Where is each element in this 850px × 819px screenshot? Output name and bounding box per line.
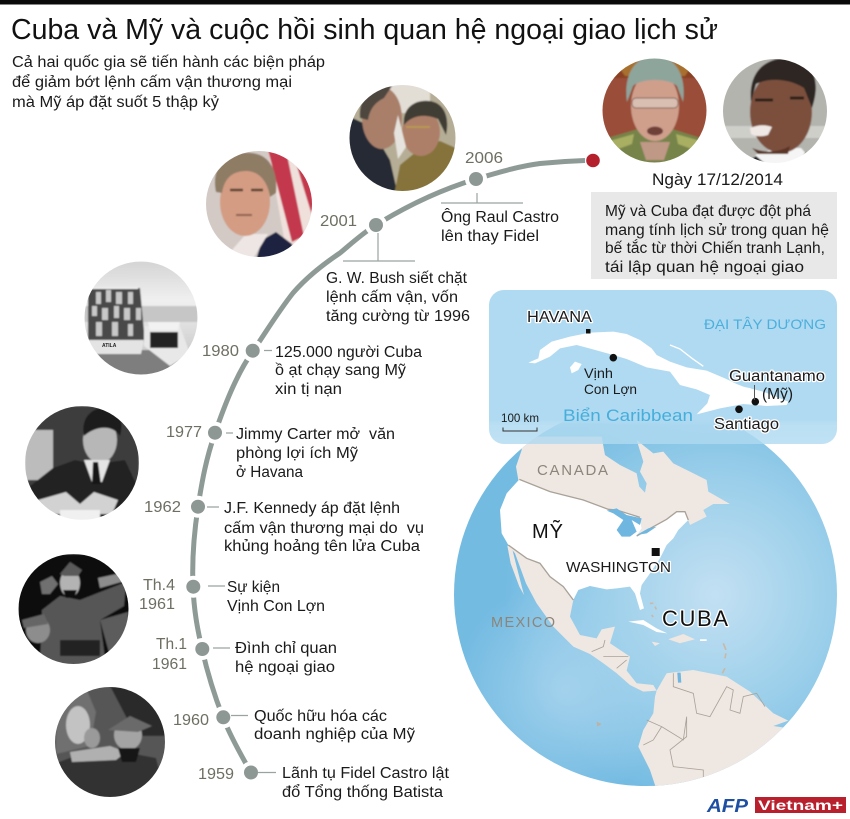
event April 1961: Sự kiện	[227, 579, 280, 596]
Caribbean islands	[652, 634, 695, 646]
event 1962	[144, 499, 424, 555]
Cuba on globe	[628, 620, 667, 633]
event 1980: 125.000 người Cuba	[275, 344, 422, 361]
event 1960: 1960	[173, 712, 209, 729]
logo: Vietnam+: Vietnam+	[758, 797, 843, 813]
event 1962: cấm vận thương mại do vụ	[224, 520, 424, 537]
land: Canada	[516, 437, 730, 536]
event 2001	[320, 213, 470, 325]
event 1977: Jimmy Carter mở văn	[236, 426, 395, 443]
event 1960: doanh nghiệp của Mỹ	[254, 726, 415, 743]
event April 1961: Vịnh Con Lợn	[227, 598, 325, 615]
photo: Mariel boats: ATILA	[102, 343, 117, 349]
event 1977	[166, 424, 395, 481]
marker: Santiago	[735, 406, 743, 413]
event 1959: đổ Tổng thống Batista	[282, 784, 443, 801]
event 2001: lệnh cấm vận, vốn	[326, 289, 458, 306]
event April 1961: Th.4	[143, 577, 175, 594]
map panel: Cuba detail: Biển Caribbean	[563, 407, 693, 425]
photo: Raul Castro	[602, 58, 706, 162]
event 2014: bế tắc từ thời Chiến tranh Lạnh,	[605, 240, 825, 257]
event 2001: 2001	[320, 213, 357, 230]
event 2014: mang tính lịch sử trong quan hệ	[605, 222, 829, 239]
photo: Barack Obama	[723, 59, 827, 163]
event 1977: 1977	[166, 424, 202, 441]
callout box	[591, 192, 837, 279]
Great Lakes	[607, 508, 642, 537]
marker: Bay of Pigs	[610, 354, 617, 362]
timeline nodes	[186, 172, 483, 780]
marker: Havana	[586, 329, 590, 334]
event January 1961: Th.1	[156, 636, 187, 653]
Cuba island	[528, 332, 788, 414]
event 1962: khủng hoảng tên lửa Cuba	[224, 538, 420, 555]
photo: George W. Bush	[206, 151, 312, 257]
event April 1961	[139, 577, 325, 615]
title: Cuba và Mỹ và cuộc hồi sinh quan hệ ngoại giao lịch sử	[11, 14, 718, 46]
borders in Central and South America	[592, 640, 765, 780]
event 1980: ồ ạt chạy sang Mỹ	[275, 362, 406, 379]
event 1977: phòng lợi ích Mỹ	[236, 445, 358, 462]
event 2014: tái lập quan hệ ngoại giao	[605, 259, 804, 276]
globe labels: CANADA	[537, 462, 608, 479]
map labels: HAVANA	[527, 309, 593, 326]
event January 1961: Đình chỉ quan	[235, 640, 337, 657]
photo: Mariel boats	[84, 261, 198, 376]
event 1980: xin tị nạn	[275, 381, 342, 398]
marker: Guantanamo	[752, 398, 759, 406]
map panel: Cuba detail	[489, 290, 837, 444]
event 1959	[198, 765, 450, 801]
event 1980: 1980	[202, 343, 239, 360]
land: Mexico and Central America	[508, 545, 657, 692]
end node	[586, 154, 600, 167]
photo: Fidel and Raul Castro	[348, 83, 458, 195]
photo: Fidel Castro 1959	[54, 686, 166, 798]
globe labels	[491, 462, 728, 631]
globe labels: WASHINGTON	[566, 559, 671, 576]
event 2006: 2006	[465, 150, 503, 167]
land: South America	[638, 670, 788, 786]
map panel: Cuba detail: ĐẠI TÂY DƯƠNG	[704, 316, 826, 332]
timeline curve	[186, 154, 600, 779]
event 1980	[202, 343, 422, 398]
logo: Vietnam+	[755, 797, 846, 813]
event 2014: Ngày 17/12/2014	[652, 171, 783, 189]
photo: Fidel Castro 1961	[18, 554, 130, 666]
event 2006	[441, 150, 559, 245]
globe map	[454, 403, 837, 793]
event 2006: Ông Raul Castro	[441, 209, 559, 226]
scale bar: 100 km	[501, 411, 539, 425]
event 1959: 1959	[198, 766, 234, 783]
scale bar	[501, 411, 539, 431]
event 2001: G. W. Bush siết chặt	[326, 270, 468, 287]
subtitle	[12, 54, 325, 111]
connector ticks	[207, 193, 523, 772]
event 2001: tăng cường từ 1996	[326, 308, 470, 325]
subtitle: mà Mỹ áp đặt suốt 5 thập kỷ	[12, 94, 219, 111]
globe labels: MỸ	[532, 519, 563, 543]
globe labels: MEXICO	[491, 615, 555, 631]
land: Baja California	[507, 546, 524, 595]
event 1962: J.F. Kennedy áp đặt lệnh	[224, 500, 400, 517]
event 1959: Lãnh tụ Fidel Castro lật	[282, 765, 450, 782]
land: United States	[500, 479, 688, 610]
event January 1961	[152, 636, 337, 676]
event 2014: Mỹ và Cuba đạt được đột phá	[605, 203, 811, 220]
photo: John F. Kennedy	[25, 406, 139, 520]
map panel: Cuba detail: Vịnh	[584, 365, 613, 381]
subtitle: Cả hai quốc gia sẽ tiến hành các biện pháp	[12, 54, 325, 71]
subtitle: để giảm bớt lệnh cấm vận thương mại	[12, 74, 292, 91]
map panel: Cuba detail: Con Lợn	[584, 381, 637, 397]
map panel: Cuba detail: (Mỹ)	[762, 386, 793, 403]
event April 1961: 1961	[139, 596, 175, 613]
event January 1961: hệ ngoại giao	[235, 659, 335, 676]
map panel: Cuba detail: Santiago	[714, 416, 779, 433]
event 1960	[173, 708, 415, 743]
top black bar	[0, 0, 850, 4]
globe labels: CUBA	[662, 606, 728, 631]
map panel: Cuba detail: Guantanamo	[729, 368, 825, 385]
event 2006: lên thay Fidel	[441, 228, 539, 245]
event 1960: Quốc hữu hóa các	[254, 708, 387, 725]
event January 1961: 1961	[152, 656, 187, 673]
event 1977: ở Havana	[236, 464, 303, 481]
event 1962: 1962	[144, 499, 181, 516]
event 2014	[591, 171, 837, 279]
logo: AFP: AFP	[706, 796, 749, 816]
